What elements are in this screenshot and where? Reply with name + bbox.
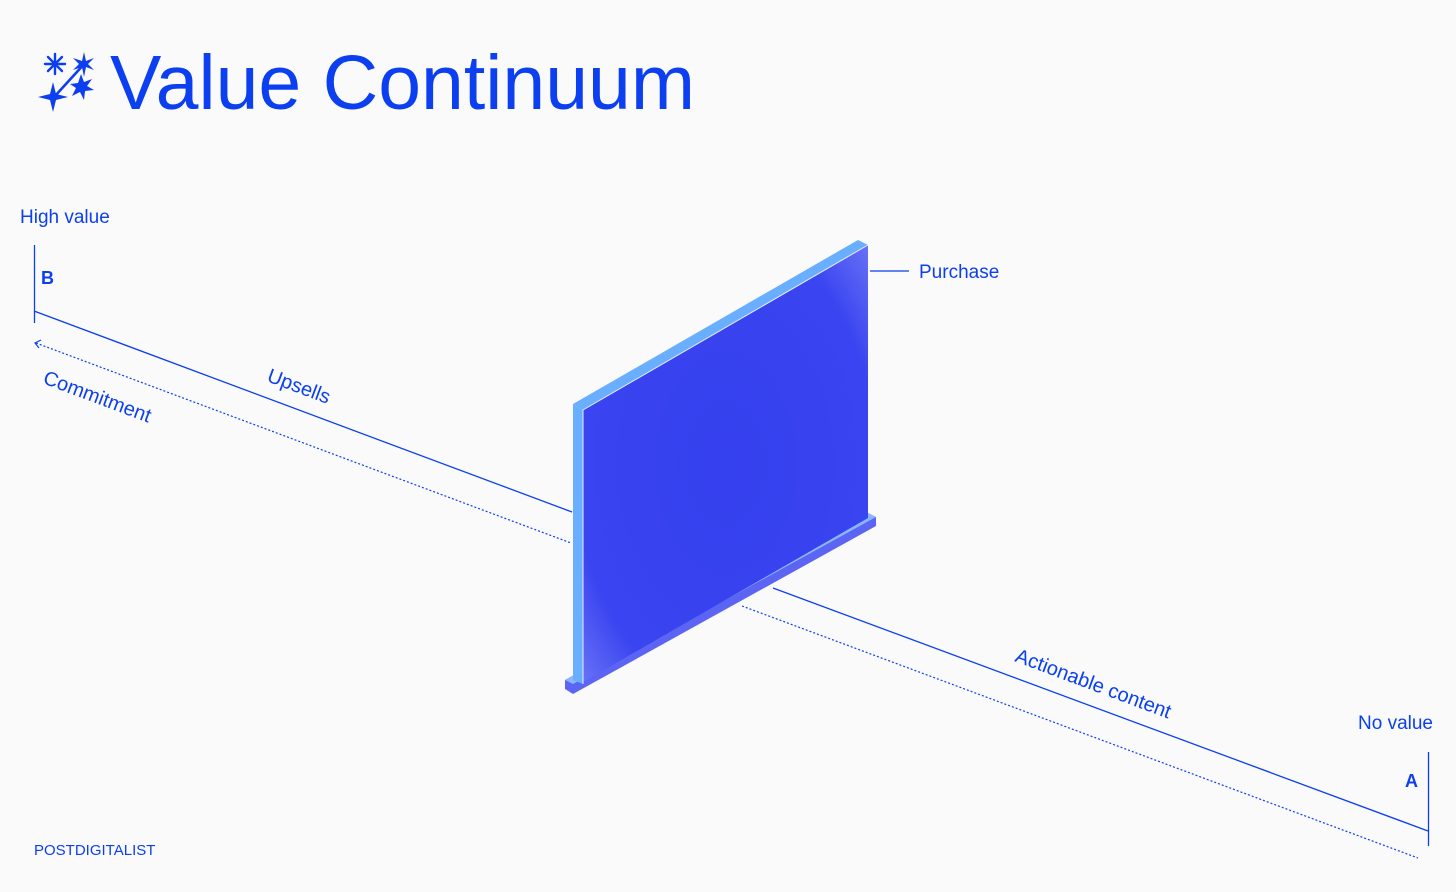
label: no value: No value xyxy=(1358,713,1433,734)
axis tick A: A xyxy=(1405,771,1418,791)
footer brand: POSTDIGITALIST xyxy=(34,842,155,859)
text: commitment: Commitment xyxy=(40,367,155,428)
axis tick A xyxy=(1405,752,1428,846)
label: purchase: Purchase xyxy=(919,262,999,283)
title: Value Continuum xyxy=(110,40,695,126)
label: purchase xyxy=(870,262,999,283)
axis tick B: B xyxy=(41,268,54,288)
text: upsells: Upsells xyxy=(264,365,333,409)
line: upsells solid xyxy=(34,311,1428,831)
axis tick B xyxy=(34,245,54,323)
wall: purchase barrier xyxy=(565,240,876,694)
line: commitment dotted arrow xyxy=(35,340,1418,858)
text: actionable content: Actionable content xyxy=(1012,645,1175,723)
icon: sparkles xyxy=(38,52,94,112)
label: high value: High value xyxy=(20,207,110,228)
